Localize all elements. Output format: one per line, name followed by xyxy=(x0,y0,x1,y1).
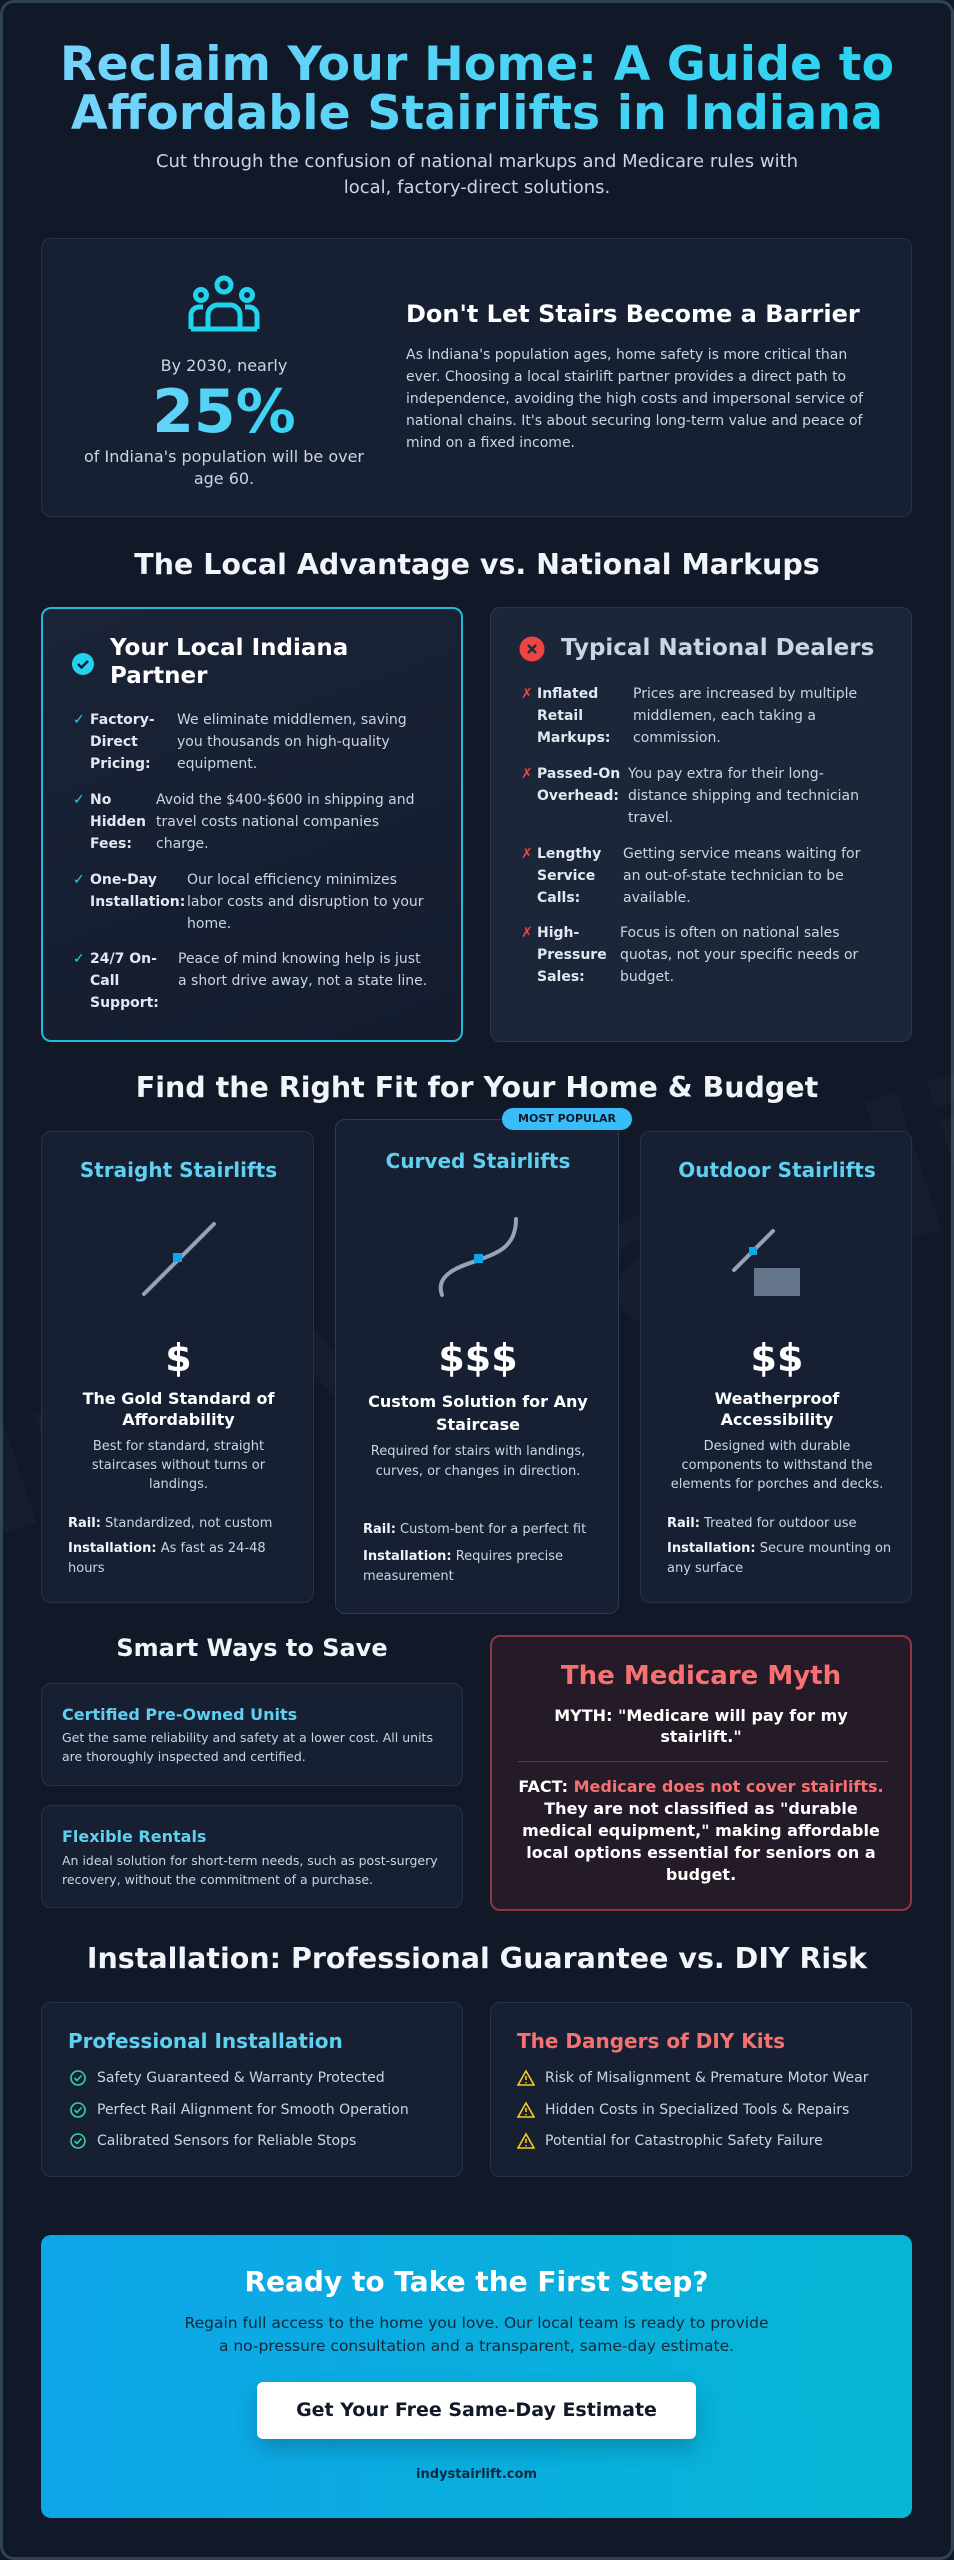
panel: rentals: An ideal solution for short-term needs, such as post-surgery recovery, without the commitment of a purchase. xyxy=(62,1853,438,1887)
icon: outdoor rail xyxy=(732,1228,800,1296)
item: One-Day Installation: xyxy=(90,872,185,910)
desc: Required for stairs with landings, curves, or changes in direction. xyxy=(371,1444,585,1479)
panel: national dealers xyxy=(490,607,912,1042)
item: ✗ xyxy=(521,766,533,782)
specs: Rail: Custom-bent for a perfect fit Installation: Requires precise measurement xyxy=(363,1522,586,1584)
text xyxy=(184,2314,768,2355)
desc: Best for standard, straight staircases without turns or landings. xyxy=(92,1439,265,1492)
myth: MYTH: "Medicare will pay for my stairlift." xyxy=(554,1706,848,1746)
button: Get Your Free Same-Day Estimate xyxy=(296,2399,657,2421)
stat text xyxy=(84,356,364,488)
text: a no-pressure consultation and a transparent, same-day estimate. xyxy=(219,2337,734,2355)
panel: professional installation: Perfect Rail Alignment for Smooth Operation xyxy=(97,2102,409,2118)
heading: right fit: Find the Right Fit for Your Home & Budget xyxy=(136,1071,818,1104)
panel: call to action xyxy=(41,2235,912,2518)
item: Factory-Direct Pricing: xyxy=(90,712,155,772)
item: We eliminate middlemen, saving you thousands on high-quality equipment. xyxy=(177,712,407,772)
heading: Typical National Dealers xyxy=(561,635,874,661)
panel: professional installation xyxy=(41,2002,463,2177)
item: You pay extra for their long-distance shipping and technician travel. xyxy=(628,766,859,826)
specs: Rail: Standardized, not custom Installation: As fast as 24-48 hours xyxy=(68,1516,272,1576)
panel: rentals: Flexible Rentals xyxy=(62,1827,206,1846)
panel: local partner xyxy=(41,607,463,1042)
item: Inflated Retail Markups: xyxy=(537,686,611,746)
specs: Rail: Treated for outdoor use Installation: Secure mounting on any surface xyxy=(667,1516,891,1576)
item: 24/7 On-Call Support: xyxy=(90,951,159,1011)
item: Avoid the $400-$600 in shipping and travel costs national companies charge. xyxy=(156,792,415,852)
icon: straight rail xyxy=(142,1222,216,1296)
item: No Hidden Fees: xyxy=(90,792,146,852)
title: Reclaim Your Home: A Guide to xyxy=(60,37,894,92)
panel: curved stairlifts xyxy=(335,1119,619,1614)
desc: Designed with durable components to withstand the elements for porches and decks. xyxy=(671,1439,883,1492)
panel: rentals xyxy=(41,1805,463,1908)
panel: stat intro xyxy=(41,238,912,517)
panel: straight stairlifts xyxy=(41,1131,314,1603)
heading: Your Local Indiana xyxy=(110,635,348,661)
item: ✗ xyxy=(521,686,533,702)
icon: check xyxy=(72,653,94,675)
item xyxy=(521,766,859,826)
title xyxy=(0,40,954,138)
text: Regain full access to the home you love. Our local team is ready to provide xyxy=(184,2314,768,2332)
title: The Medicare Myth xyxy=(561,1661,841,1691)
panel: pre-owned: Get the same reliability and safety at a lower cost. All units are thoroughly inspected and certified. xyxy=(62,1730,433,1764)
list: Safety Guaranteed & Warranty Protected xyxy=(97,2070,385,2086)
title: Affordable Stairlifts in Indiana xyxy=(71,86,883,141)
item: Our local efficiency minimizes labor costs and disruption to your home. xyxy=(187,872,424,932)
item: ✓ xyxy=(73,872,85,888)
badge: most popular xyxy=(502,1108,632,1130)
icon: curved rail xyxy=(438,1217,518,1297)
heading: Partner xyxy=(110,663,207,689)
panel: professional installation: Professional Installation xyxy=(68,2029,343,2053)
item: Getting service means waiting for an out-of-state technician to be available. xyxy=(623,846,860,906)
item xyxy=(73,712,407,772)
panel: DIY dangers: Hidden Costs in Specialized Tools & Repairs xyxy=(545,2102,849,2118)
item: Prices are increased by multiple middlemen, each taking a commission. xyxy=(633,686,857,746)
icon: x xyxy=(520,636,544,662)
item xyxy=(521,686,857,746)
panel: outdoor stairlifts xyxy=(640,1131,912,1603)
item: ✗ xyxy=(521,925,533,941)
item: Passed-On Overhead: xyxy=(537,766,620,804)
item xyxy=(73,872,424,932)
item: ✓ xyxy=(73,951,85,967)
stat text: of Indiana's population will be over age 60. xyxy=(84,447,364,488)
icon: people xyxy=(188,276,260,332)
heading xyxy=(110,635,348,689)
stat text: 25% xyxy=(152,377,296,447)
heading: smart ways: Smart Ways to Save xyxy=(116,1634,388,1662)
heading: installation: Installation: Professional Guarantee vs. DIY Risk xyxy=(87,1942,867,1975)
text: barrier paragraph: As Indiana's population ages, home safety is more critical than ever. Choosing a local stairlift partner provides a direct path to independence, avoiding the high costs and impersonal service of national chains. It's about securing long-term value and peace of mind on a fixed income. xyxy=(406,347,863,451)
subtitle: The Gold Standard of Affordability xyxy=(83,1389,274,1429)
item: High-Pressure Sales: xyxy=(537,925,607,985)
heading: barrier: Don't Let Stairs Become a Barrier xyxy=(406,300,860,328)
heading: local advantage: The Local Advantage vs. National Markups xyxy=(134,548,820,581)
panel: DIY dangers: Potential for Catastrophic Safety Failure xyxy=(545,2133,823,2149)
title: Curved Stairlifts xyxy=(386,1149,570,1173)
panel: professional installation: Calibrated Sensors for Reliable Stops xyxy=(97,2133,356,2149)
panel: medicare myth xyxy=(490,1635,912,1911)
badge: most popular: MOST POPULAR xyxy=(518,1112,616,1125)
item: ✓ xyxy=(73,712,85,728)
subtitle: Cut through the confusion of national markups and Medicare rules with local, factory-direct solutions. xyxy=(156,151,798,198)
heading: Ready to Take the First Step? xyxy=(244,2265,709,2298)
price: $$ xyxy=(751,1336,803,1380)
panel: DIY dangers xyxy=(490,2002,912,2177)
item: Lengthy Service Calls: xyxy=(537,846,601,906)
item xyxy=(521,846,860,906)
panel: DIY dangers: The Dangers of DIY Kits xyxy=(517,2029,785,2053)
item: Focus is often on national sales quotas, not your specific needs or budget. xyxy=(620,925,858,985)
item: Peace of mind knowing help is just a short drive away, not a state line. xyxy=(178,951,427,989)
subtitle: Custom Solution for Any Staircase xyxy=(368,1392,588,1434)
title: Outdoor Stairlifts xyxy=(678,1158,876,1182)
price: $ xyxy=(165,1336,192,1380)
button xyxy=(257,2382,696,2439)
list: Risk of Misalignment & Premature Motor Wear xyxy=(545,2070,868,2086)
panel: pre-owned: Certified Pre-Owned Units xyxy=(62,1705,297,1724)
price: $$$ xyxy=(438,1336,518,1380)
item: ✓ xyxy=(73,792,85,808)
url: indystairlift.com xyxy=(416,2467,537,2482)
item xyxy=(73,951,427,1011)
item: ✗ xyxy=(521,846,533,862)
stat text: By 2030, nearly xyxy=(161,356,287,375)
title: Straight Stairlifts xyxy=(80,1158,277,1182)
panel: pre-owned xyxy=(41,1683,463,1786)
subtitle: Weatherproof Accessibility xyxy=(715,1389,839,1429)
fact: FACT: Medicare does not cover stairlifts. They are not classified as "durable medical equipment," making affordable local options essential for seniors on a budget. xyxy=(518,1777,884,1884)
